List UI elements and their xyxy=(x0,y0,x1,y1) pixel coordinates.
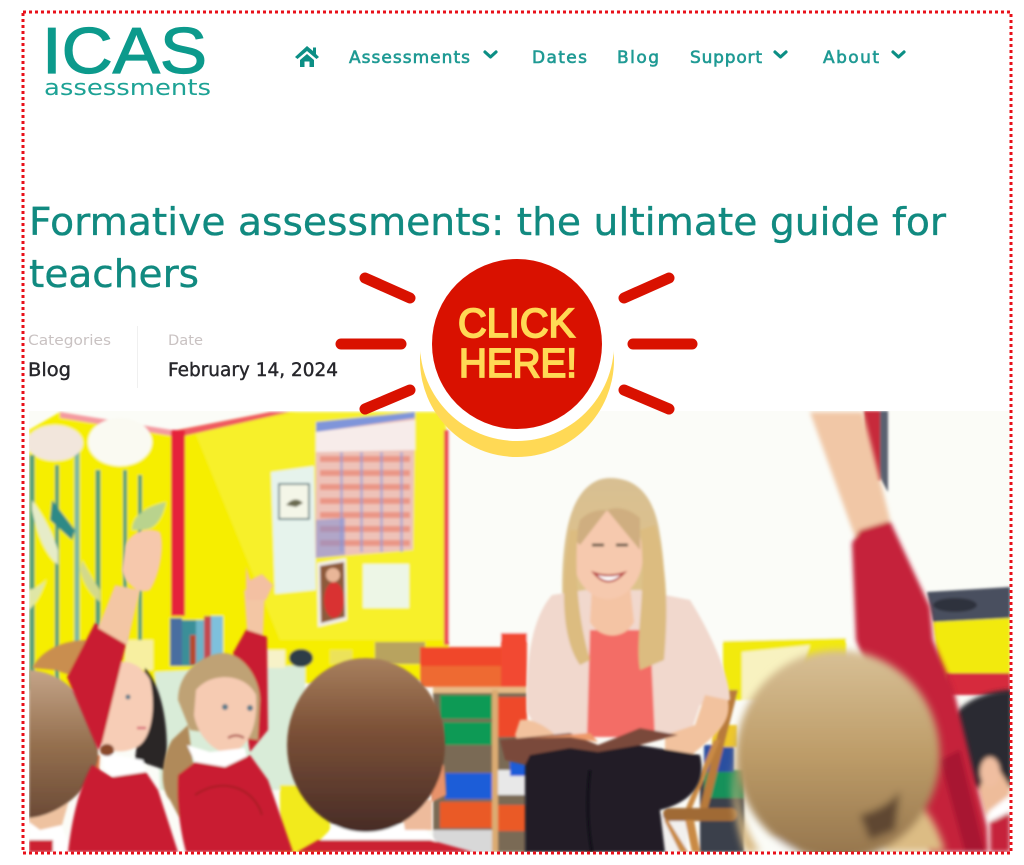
badge label: HERE! xyxy=(459,340,577,386)
trousers xyxy=(525,742,702,852)
post meta: categories and date: Categories xyxy=(28,333,111,349)
title: Formative assessments: the ultimate guide for xyxy=(29,200,946,244)
flower stems xyxy=(32,450,140,690)
logo: ICAS assessments: assessments xyxy=(44,76,211,101)
chair back and seat xyxy=(700,780,744,852)
title: teachers xyxy=(29,252,199,296)
cupboard xyxy=(125,640,153,670)
front boy back of head xyxy=(287,658,473,852)
navigation bar xyxy=(295,46,904,68)
icon: chevron assessments xyxy=(485,52,496,57)
badge label: CLICK xyxy=(458,300,575,346)
girl with raised arm, centre xyxy=(163,566,293,852)
badge white ring xyxy=(420,247,614,441)
title xyxy=(29,200,946,296)
navigation bar: Blog xyxy=(617,48,659,68)
dark haired boy, far right xyxy=(956,686,1010,852)
teacher xyxy=(500,478,730,852)
badge rays xyxy=(341,278,692,409)
icon: home xyxy=(295,46,319,67)
student with raised arm, right foreground xyxy=(810,412,988,852)
open book xyxy=(500,728,678,765)
badge label xyxy=(458,300,577,386)
cardigan xyxy=(527,590,730,735)
wall papers xyxy=(271,466,316,594)
click here badge xyxy=(341,247,692,457)
neck and chest xyxy=(590,585,634,636)
badge yellow crescent xyxy=(420,263,614,457)
post meta: categories and date: Date xyxy=(168,333,203,349)
navigation bar: Assessments xyxy=(349,48,470,68)
hair strands over shoulders xyxy=(564,530,590,665)
post meta: categories and date: Blog xyxy=(28,359,71,381)
classroom walls and displays xyxy=(27,411,1010,852)
forearms xyxy=(515,720,555,745)
girl with raised arm, left xyxy=(32,530,178,852)
post meta: categories and date: February 14, 2024 xyxy=(168,359,338,381)
icon: chevron support xyxy=(775,52,786,57)
storage trays and shelves xyxy=(420,647,503,667)
books on shelf xyxy=(170,616,223,666)
right side wall xyxy=(723,638,846,700)
face xyxy=(573,511,643,599)
teacher hair back xyxy=(560,476,664,594)
pink top xyxy=(587,630,655,737)
navigation bar: Support xyxy=(690,48,762,68)
navigation bar: About xyxy=(823,48,879,68)
logo: ICAS assessments: ICAS xyxy=(42,14,207,87)
badge red disc xyxy=(432,259,602,429)
icon: chevron about xyxy=(893,52,904,57)
wall poster chart xyxy=(315,412,415,558)
left boy back of head xyxy=(29,670,100,852)
post meta: categories and date xyxy=(28,326,338,388)
navigation bar: Dates xyxy=(532,48,587,68)
classroom photo illustration xyxy=(27,411,1012,860)
blonde student back of head xyxy=(733,650,945,860)
